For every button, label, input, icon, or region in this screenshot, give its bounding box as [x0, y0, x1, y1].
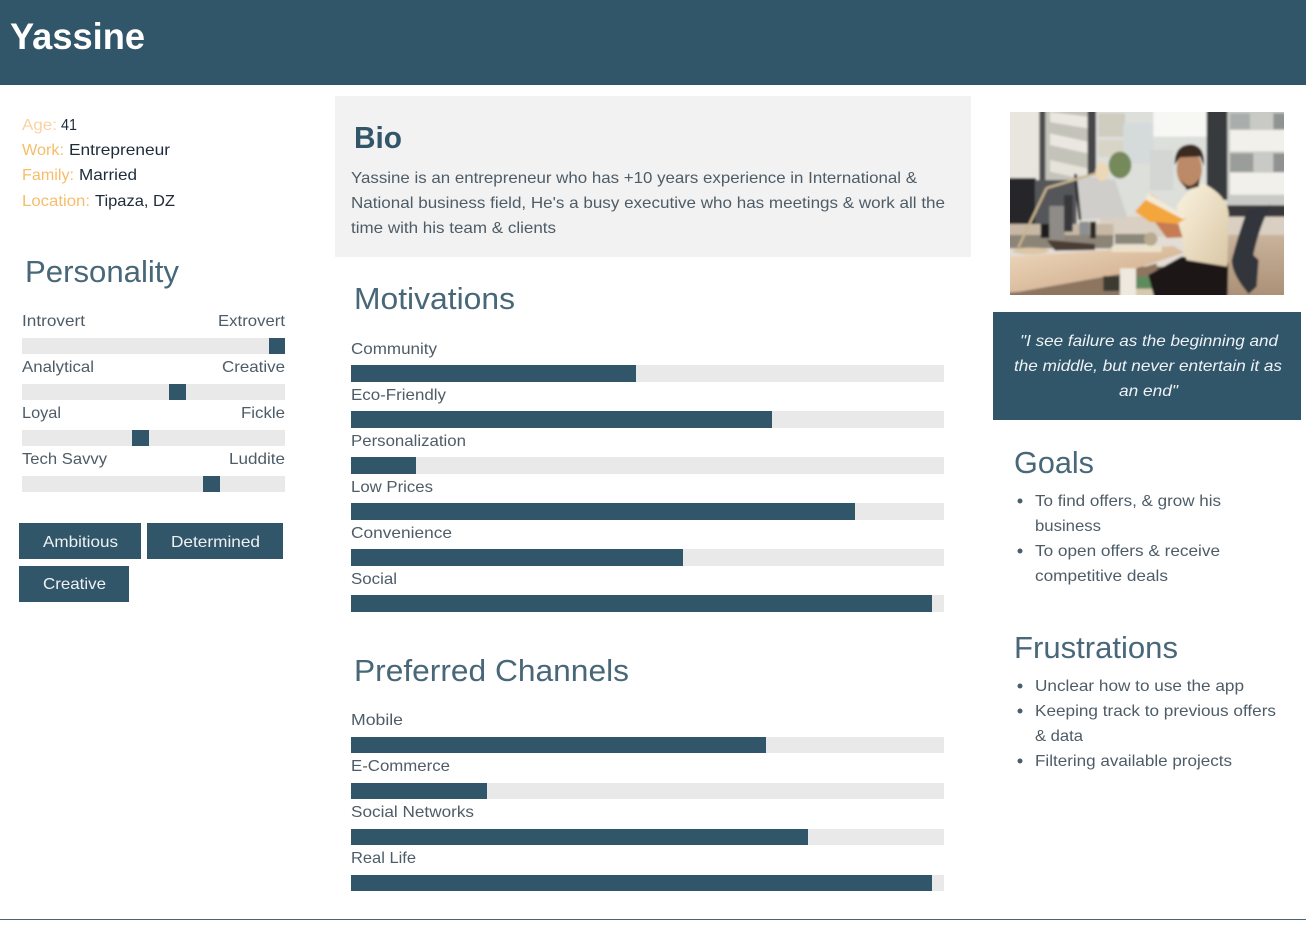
- chair: [1232, 205, 1271, 294]
- page header: [0, 0, 1306, 85]
- bio text: Yassine is an entrepreneur who has +10 years experience in International &: [351, 170, 917, 187]
- heading: Preferred Channels: Preferred Channels: [354, 653, 629, 688]
- heading: Motivations: Motivations: [354, 281, 515, 316]
- bar: Mobile: Mobile: [351, 712, 403, 729]
- quote callout: [993, 312, 1301, 420]
- bar: Convenience: Convenience: [351, 525, 452, 542]
- heading: Frustrations: Frustrations: [1014, 630, 1178, 665]
- slider: tech savvy to luddite: Tech Savvy: [22, 451, 107, 468]
- bar: Eco-Friendly: Eco-Friendly: [351, 387, 446, 404]
- slider: introvert to extrovert: [22, 313, 286, 354]
- panel: frustrations: [1014, 630, 1276, 770]
- panel: demographics: Married: [79, 167, 137, 184]
- bio text: National business field, He's a busy executive who has meetings & work all the: [351, 195, 945, 212]
- heading: Goals: Goals: [1014, 445, 1094, 480]
- bar: Social Networks: Social Networks: [351, 804, 474, 821]
- panel: demographics: Location:: [22, 193, 90, 210]
- bar: Real Life: [351, 850, 944, 891]
- slider: loyal to fickle: [22, 405, 285, 446]
- bio text: time with his team & clients: [351, 220, 556, 237]
- goals list: To open offers & receive: [1035, 543, 1220, 560]
- goals list: To find offers, & grow his: [1035, 493, 1221, 510]
- tag: Creative: [19, 566, 129, 602]
- slider: analytical to creative: [22, 359, 285, 400]
- quote callout: the middle, but never entertain it as: [1014, 358, 1282, 375]
- bar: Mobile: [351, 712, 944, 753]
- slider: introvert to extrovert: Introvert: [22, 313, 86, 330]
- panel: preferred channels: [351, 653, 944, 891]
- goals list: [1018, 493, 1221, 585]
- frustrations list: Filtering available projects: [1035, 753, 1232, 770]
- panel: demographics: Entrepreneur: [69, 142, 171, 159]
- panel: demographics: 41: [61, 117, 77, 134]
- panel: demographics: Family:: [22, 167, 74, 184]
- man: [1148, 257, 1228, 307]
- goals list: competitive deals: [1035, 568, 1168, 585]
- bar: Personalization: [351, 433, 944, 474]
- bar: Low Prices: [351, 479, 944, 520]
- tag: Creative: Creative: [43, 576, 106, 593]
- tag: Determined: [147, 523, 283, 559]
- bar: Low Prices: Low Prices: [351, 479, 433, 496]
- quote callout: "I see failure as the beginning and: [1020, 333, 1279, 350]
- panel: personality: [22, 254, 286, 492]
- panel: demographics: Tipaza, DZ: [95, 193, 175, 210]
- slider: tech savvy to luddite: Luddite: [229, 451, 285, 468]
- bar: Social Networks: [351, 804, 944, 845]
- slider: analytical to creative: Creative: [222, 359, 285, 376]
- slider: analytical to creative: Analytical: [22, 359, 94, 376]
- frustrations list: [1018, 678, 1276, 770]
- panel: motivations: [351, 281, 944, 612]
- slider: loyal to fickle: Fickle: [241, 405, 285, 422]
- frustrations list: Keeping track to previous offers: [1035, 703, 1276, 720]
- panel: bio: [335, 96, 971, 257]
- bar: Social: [351, 571, 944, 612]
- panel: demographics: [22, 117, 175, 210]
- bar: Community: Community: [351, 341, 437, 358]
- dark equipment left: [1000, 178, 1036, 225]
- slider: loyal to fickle: Loyal: [22, 405, 61, 422]
- tag: Ambitious: Ambitious: [43, 534, 118, 551]
- bio text: [351, 170, 945, 237]
- panel: demographics: Age:: [22, 117, 57, 134]
- frustrations list: Unclear how to use the app: [1035, 678, 1244, 695]
- title: Yassine: Yassine: [10, 16, 145, 57]
- photo: man reading at office desk: [1010, 112, 1284, 295]
- bar: E-Commerce: E-Commerce: [351, 758, 450, 775]
- bar: Social: Social: [351, 571, 397, 588]
- panel: goals: [1014, 445, 1221, 585]
- windows and wall: [1000, 100, 1300, 307]
- slider: introvert to extrovert: Extrovert: [218, 313, 286, 330]
- back wall and wood: [1100, 217, 1300, 237]
- heading: Personality: Personality: [25, 254, 179, 289]
- quote callout: an end": [1119, 383, 1179, 400]
- bar: Convenience: [351, 525, 944, 566]
- under desk and desk: [1100, 267, 1200, 303]
- bar: Community: [351, 341, 944, 382]
- tag: Ambitious: [19, 523, 141, 559]
- monitors and desk items: [1076, 175, 1127, 219]
- panel: demographics: Work:: [22, 142, 64, 159]
- heading: Bio: Bio: [354, 120, 402, 155]
- bar: E-Commerce: [351, 758, 944, 799]
- bar: Eco-Friendly: [351, 387, 944, 428]
- bar: Personalization: Personalization: [351, 433, 466, 450]
- goals list: business: [1035, 518, 1101, 535]
- frustrations list: & data: [1035, 728, 1083, 745]
- bar: Real Life: Real Life: [351, 850, 416, 867]
- tag: Determined: Determined: [171, 534, 260, 551]
- slider: tech savvy to luddite: [22, 451, 285, 492]
